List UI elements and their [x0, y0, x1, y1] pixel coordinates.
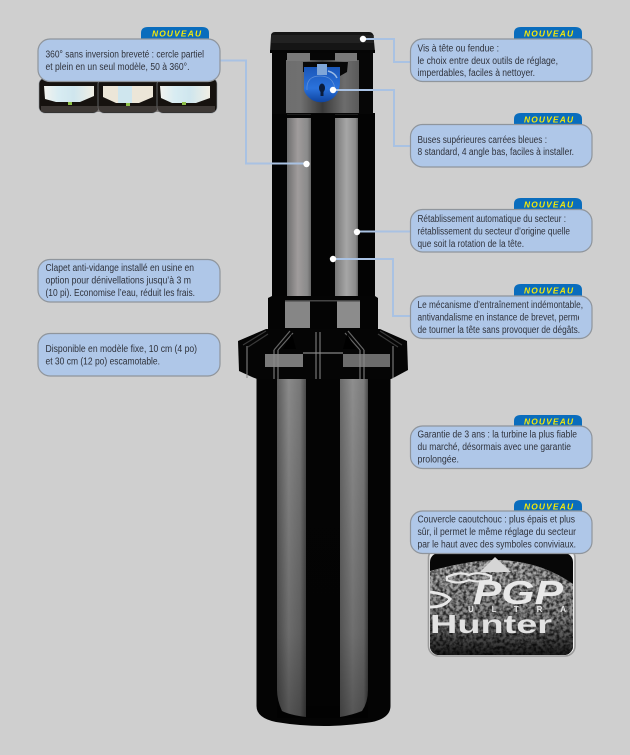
- photo strip: sector settings: [39, 78, 217, 113]
- badge: nouveau: NOUVEAU: [524, 286, 574, 296]
- callout: vis a tete: [410, 27, 592, 82]
- callout: vis a tete: imperdables, faciles à nettoyer.: [418, 68, 535, 79]
- callout: retablissement: [410, 198, 592, 252]
- lower body: [256, 372, 390, 726]
- flange: [238, 329, 408, 379]
- callout: garantie: [410, 415, 592, 468]
- callout: mecanisme: [410, 284, 592, 338]
- callout: retablissement: que soit la rotation de la tête.: [418, 239, 524, 250]
- badge: nouveau: [514, 113, 582, 128]
- callout: sans inversion: 360° sans inversion breveté : cercle partiel: [46, 50, 204, 60]
- callout: mecanisme: Le mécanisme d’entraînement indémontable,: [418, 300, 583, 311]
- callout: couvercle: sûr, il permet le même réglage du secteur: [418, 527, 577, 538]
- callout: vis a tete: Vis à tête ou fendue :: [418, 44, 499, 54]
- callout: buses: Buses supérieures carrées bleues :: [418, 135, 547, 146]
- badge: nouveau: NOUVEAU: [524, 200, 574, 210]
- photo: rubber cover: [428, 548, 575, 656]
- badge: nouveau: NOUVEAU: [524, 114, 574, 124]
- badge: nouveau: [514, 198, 582, 213]
- badge: nouveau: [514, 500, 582, 515]
- callout: clapet: [38, 260, 220, 302]
- sprinkler body: [238, 32, 408, 726]
- badge: nouveau: [514, 284, 582, 299]
- callout: disponible: [38, 334, 220, 376]
- head section: [272, 50, 373, 114]
- callout: garantie: Garantie de 3 ans : la turbine la plus fiable: [418, 430, 577, 440]
- callout: clapet: (10 pi). Economise l’eau, réduit les frais.: [46, 288, 195, 299]
- callout: disponible: et 30 cm (12 po) escamotable.: [46, 356, 160, 368]
- connector lines: [220, 36, 410, 316]
- textured cap: [270, 32, 375, 53]
- collar: [268, 296, 378, 330]
- callout: clapet: Clapet anti-vidange installé en usine en: [46, 263, 194, 274]
- callout: sans inversion: [38, 27, 220, 82]
- badge: nouveau: NOUVEAU: [524, 416, 574, 426]
- callout: couvercle: par le haut avec des symboles conviviaux.: [418, 540, 576, 550]
- badge: nouveau: [514, 27, 582, 42]
- callout: vis a tete: le choix entre deux outils de réglage,: [418, 56, 558, 67]
- upper tube: [272, 113, 375, 299]
- badge: nouveau: [141, 27, 209, 42]
- photo: rubber cover: ULTRA: [468, 605, 566, 614]
- badge: nouveau: [514, 415, 582, 430]
- callout: buses: [410, 113, 592, 167]
- badge: nouveau: NOUVEAU: [524, 502, 574, 512]
- callout: mecanisme: antivandalisme en instance de brevet, permet: [418, 312, 585, 324]
- callout: couvercle: [410, 500, 592, 554]
- callout: buses: 8 standard, 4 angle bas, faciles à installer.: [418, 147, 574, 158]
- photo: rubber cover: PGP: [473, 574, 564, 611]
- callout: clapet: option pour dénivellations jusqu’à 3 m: [46, 276, 191, 286]
- callout: mecanisme: de tourner la tête sans provoquer de dégâts.: [418, 325, 580, 336]
- icon: blue nozzle: [303, 62, 348, 102]
- callout: sans inversion: et plein en un seul modèle, 50 à 360°.: [46, 62, 190, 73]
- callout: retablissement: Rétablissement automatique du secteur :: [418, 214, 566, 225]
- callout: garantie: prolongée.: [418, 454, 459, 466]
- callout: disponible: Disponible en modèle fixe, 10 cm (4 po): [46, 344, 197, 355]
- photo: rubber cover: Hunter: [430, 609, 552, 639]
- badge: nouveau: NOUVEAU: [524, 28, 574, 38]
- callout: couvercle: Couvercle caoutchouc : plus épais et plus: [418, 514, 575, 526]
- callout: garantie: du marché, désormais avec une garantie: [418, 442, 571, 453]
- badge: nouveau: NOUVEAU: [152, 28, 202, 38]
- callout: retablissement: rétablissement du secteur d’origine quelle: [418, 226, 570, 238]
